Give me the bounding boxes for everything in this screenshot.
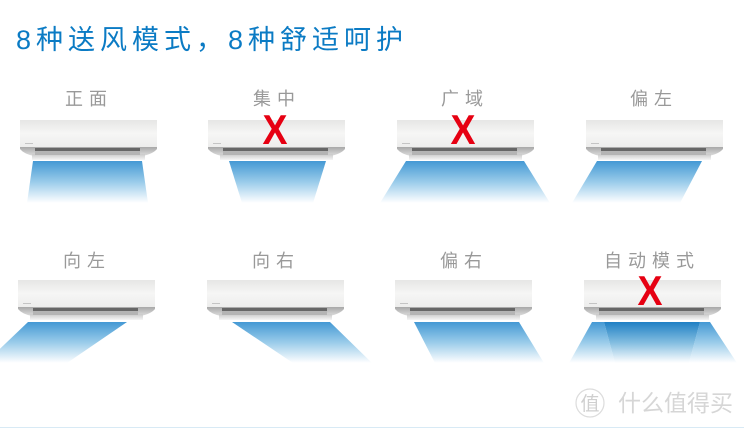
panel: 偏右 bbox=[395, 251, 544, 363]
red X mark: X bbox=[638, 267, 663, 314]
airflow bbox=[229, 161, 326, 203]
panel: 正面 bbox=[20, 89, 157, 203]
unit bbox=[208, 120, 345, 160]
airflow bbox=[0, 322, 127, 363]
panel: 集中 bbox=[208, 89, 345, 203]
label: 向左: 向左 bbox=[63, 251, 111, 271]
red X mark: X bbox=[450, 106, 476, 153]
unit bbox=[395, 280, 532, 320]
label: 正面: 正面 bbox=[65, 89, 113, 109]
label: 自动模式: 自动模式 bbox=[604, 251, 700, 271]
label: 向右: 向右 bbox=[252, 251, 300, 271]
unit bbox=[207, 280, 344, 320]
watermark logo: 值 bbox=[580, 393, 600, 415]
title: 8种送风模式，8种舒适呵护 bbox=[16, 25, 408, 55]
airflow bbox=[414, 322, 544, 363]
panel: 广域 bbox=[380, 89, 550, 203]
unit bbox=[20, 120, 157, 160]
watermark bbox=[576, 389, 733, 417]
airflow bbox=[380, 161, 550, 203]
unit bbox=[397, 120, 534, 160]
airflow bbox=[572, 161, 702, 203]
panel: 向左 bbox=[0, 251, 155, 363]
unit bbox=[584, 280, 721, 320]
label: 偏右: 偏右 bbox=[440, 251, 488, 271]
airflow bbox=[27, 161, 148, 203]
panel: 向右 bbox=[207, 251, 372, 363]
panel: 自动模式 bbox=[569, 251, 737, 363]
unit bbox=[18, 280, 155, 320]
airflow: right bbox=[689, 322, 737, 363]
red X mark: X bbox=[262, 106, 288, 153]
unit bbox=[586, 120, 723, 160]
watermark text: 什么值得买 bbox=[618, 390, 733, 416]
panel: 偏左 bbox=[572, 89, 723, 203]
label: 偏左: 偏左 bbox=[630, 89, 678, 109]
airflow: left bbox=[569, 322, 615, 363]
watermark logo bbox=[576, 389, 604, 417]
label: 集中: 集中 bbox=[253, 89, 301, 109]
airflow bbox=[232, 322, 372, 363]
label: 广域: 广域 bbox=[441, 89, 489, 109]
airflow: centre bbox=[604, 322, 700, 363]
